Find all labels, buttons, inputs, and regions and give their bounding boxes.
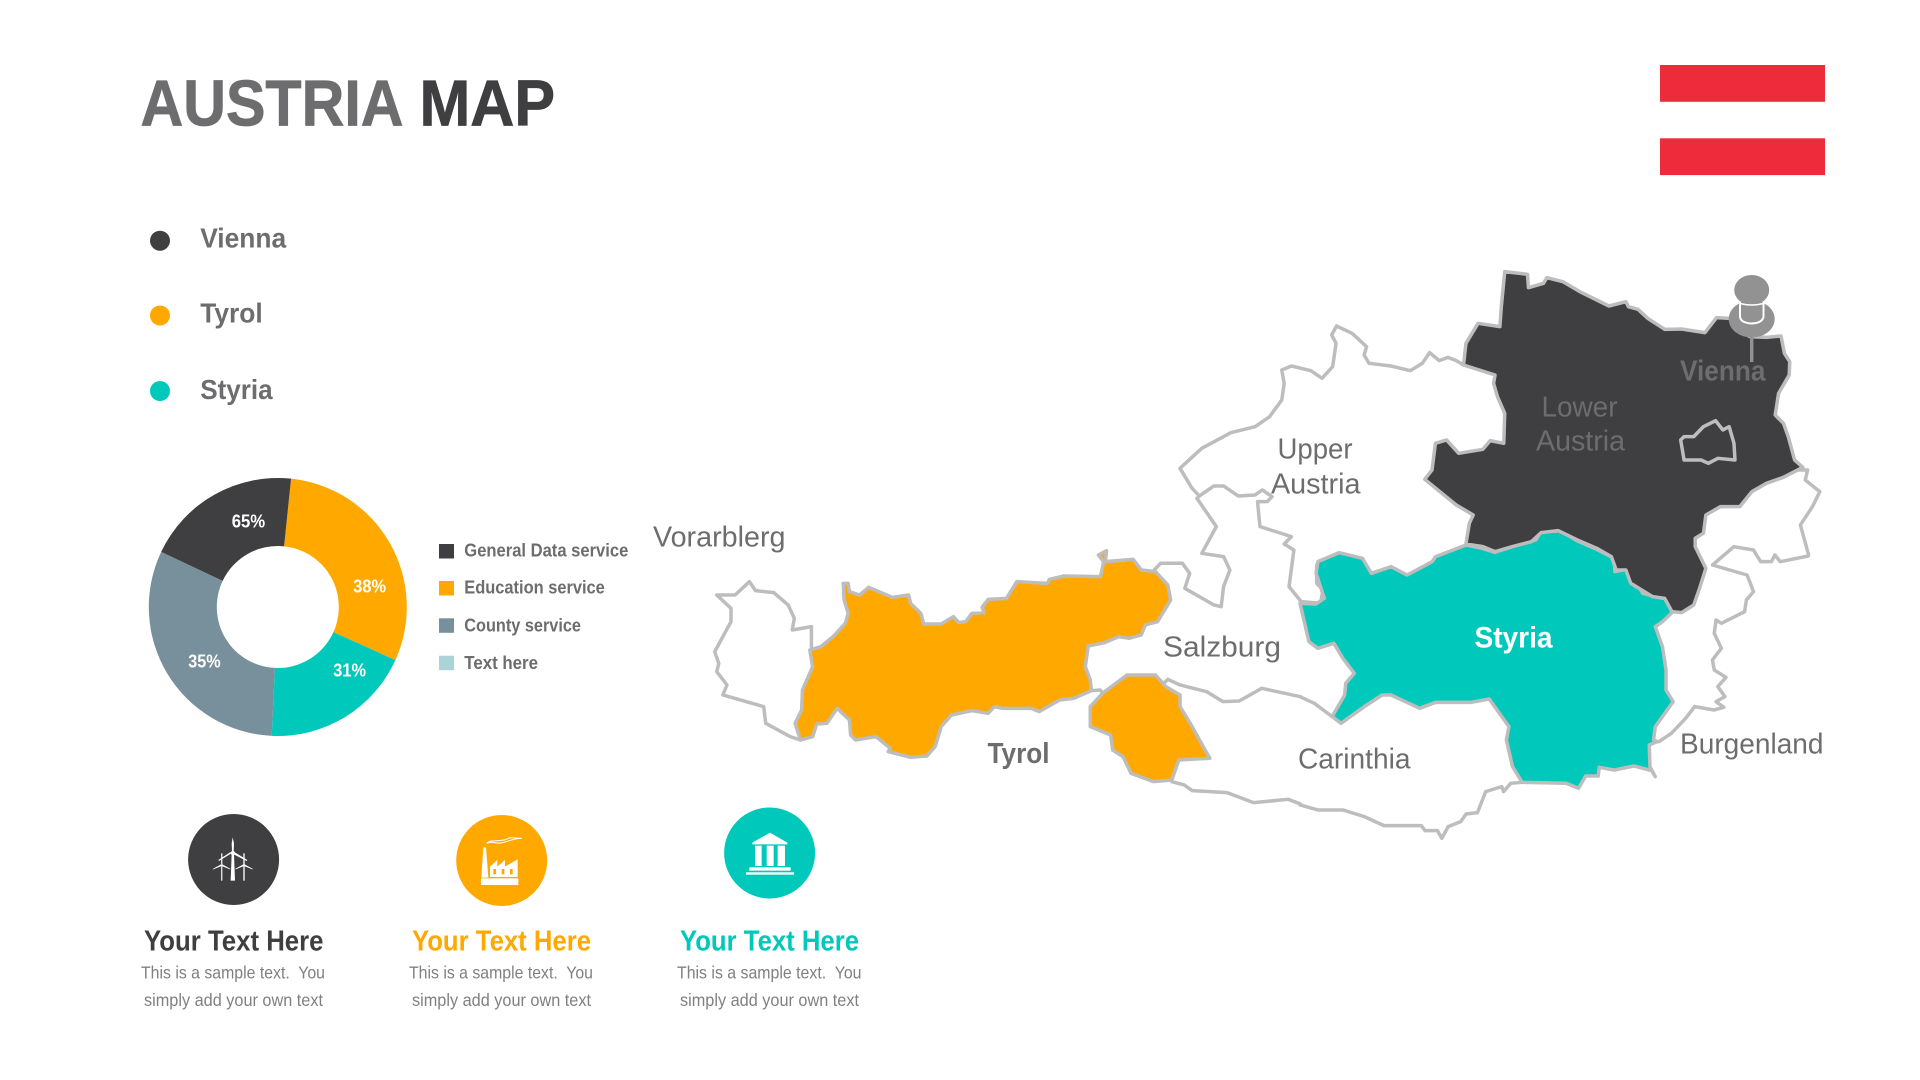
icon: wind turbines: [188, 814, 279, 905]
donut value labels: [188, 512, 386, 681]
heading: Your Text Here: [144, 926, 324, 958]
map labels: Vienna: [1680, 356, 1766, 388]
heading: Your Text Here: [680, 926, 859, 958]
region: Vienna outline: [1681, 421, 1735, 463]
region: Carinthia north border east: [1300, 697, 1332, 717]
legend item: Styria: Styria: [200, 374, 273, 405]
description: [141, 962, 325, 1010]
chart legend: Education service: [464, 578, 605, 598]
donut slice: 35%: [149, 552, 275, 736]
donut value labels: 35%: [188, 651, 221, 671]
map labels: [653, 356, 1824, 775]
map labels: Lower: [1542, 392, 1618, 424]
icon: Austrian flag: [1660, 65, 1825, 175]
heading: Your Text Here: [412, 926, 591, 958]
description: This is a sample text. You: [409, 962, 593, 982]
donut value labels: 65%: [232, 512, 265, 532]
chart legend: General Data service: [464, 541, 628, 561]
donut chart: [149, 478, 407, 736]
region: Carinthia south border west: [1172, 782, 1300, 804]
donut value labels: 31%: [333, 661, 366, 681]
description: This is a sample text. You: [677, 962, 862, 982]
map labels: Austria: [1536, 426, 1626, 458]
donut slice: 65%: [161, 478, 291, 581]
description: simply add your own text: [144, 990, 323, 1010]
title: AUSTRIA: [140, 67, 404, 140]
region: Carinthia north border: [1164, 679, 1300, 702]
region: Salzburg south outline: [1091, 690, 1102, 693]
region: Burgenland north: [1797, 470, 1820, 555]
map labels: Salzburg: [1163, 632, 1281, 664]
title: MAP: [420, 67, 555, 140]
chart legend: County service: [464, 616, 581, 636]
region: Salzburg north outline: [1154, 496, 1230, 607]
legend item: Vienna: Vienna: [200, 223, 287, 254]
description: This is a sample text. You: [141, 962, 325, 982]
legend item: Styria: [150, 374, 273, 405]
map labels: Upper: [1278, 433, 1353, 465]
icon: classical building: [724, 808, 815, 898]
region: Styria: [1300, 531, 1673, 788]
region: Carinthia south border east: [1300, 782, 1522, 838]
icon: map pin: [1729, 275, 1775, 362]
region: East Tyrol: [1090, 675, 1210, 782]
chart legend: [439, 541, 628, 673]
legend: highlighted regions: [150, 223, 287, 405]
map labels: Vorarblerg: [653, 522, 786, 554]
info block: wind energy: [141, 814, 325, 1010]
donut slice: 38%: [284, 479, 407, 660]
map labels: Austria: [1271, 468, 1361, 500]
chart legend: Text here: [464, 653, 538, 673]
description: simply add your own text: [412, 990, 591, 1010]
icon: factory: [456, 815, 547, 906]
region: Vorarlberg: [715, 582, 811, 740]
map labels: Burgenland: [1680, 728, 1824, 760]
description: [677, 962, 862, 1010]
legend item: Tyrol: [150, 298, 263, 328]
donut slice: 31%: [272, 632, 395, 736]
info block: factory: [409, 815, 593, 1010]
title: [140, 67, 555, 140]
donut value labels: 38%: [353, 577, 386, 597]
map labels: Tyrol: [988, 738, 1050, 770]
info block: institution: [677, 808, 862, 1010]
legend item: Vienna: [150, 223, 287, 254]
region: Tyrol north: [795, 551, 1171, 757]
map labels: Styria: [1474, 622, 1553, 654]
region: Burgenland south: [1659, 547, 1808, 742]
region: Upper Austria outline: [1180, 326, 1464, 603]
legend item: Tyrol: Tyrol: [200, 298, 263, 328]
map of Austria: [653, 272, 1824, 838]
map labels: Carinthia: [1298, 743, 1411, 775]
region: Lower Austria: [1425, 272, 1803, 613]
description: [409, 962, 593, 1010]
description: simply add your own text: [680, 990, 859, 1010]
